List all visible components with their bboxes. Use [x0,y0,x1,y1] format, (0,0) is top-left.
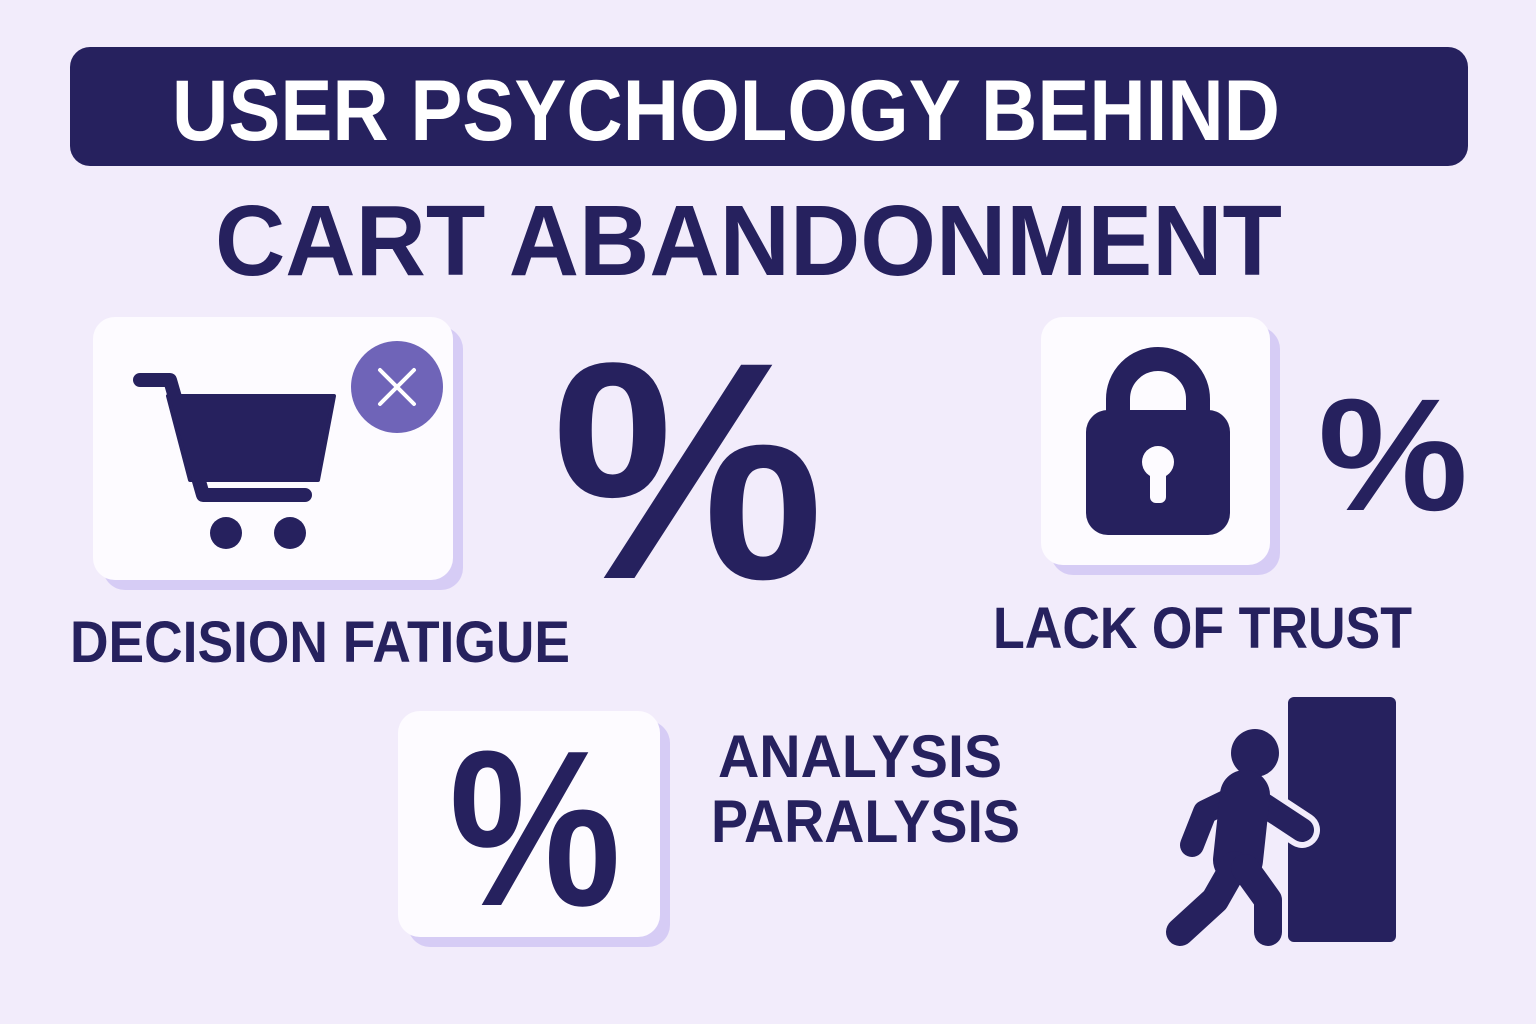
label: lack of trust: LACK OF TRUST [993,596,1412,661]
icon: padlock [1086,359,1230,535]
label: analysis paralysis [711,723,1020,855]
label: decision fatigue: DECISION FATIGUE [70,610,570,675]
card: percent: % [449,705,621,953]
subtitle: CART ABANDONMENT [215,185,1282,297]
icon: shopping cart [140,380,334,549]
small percent: % [1318,365,1468,544]
card: cart [93,317,463,590]
label: analysis paralysis: ANALYSIS [718,723,1002,790]
label: analysis paralysis: PARALYSIS [711,788,1020,855]
card: lock [1041,317,1280,575]
icon: person leaving through door [1180,697,1396,942]
icon: remove badge [351,341,443,433]
title bar: USER PSYCHOLOGY BEHIND [172,63,1280,159]
big percent: % [552,297,824,644]
